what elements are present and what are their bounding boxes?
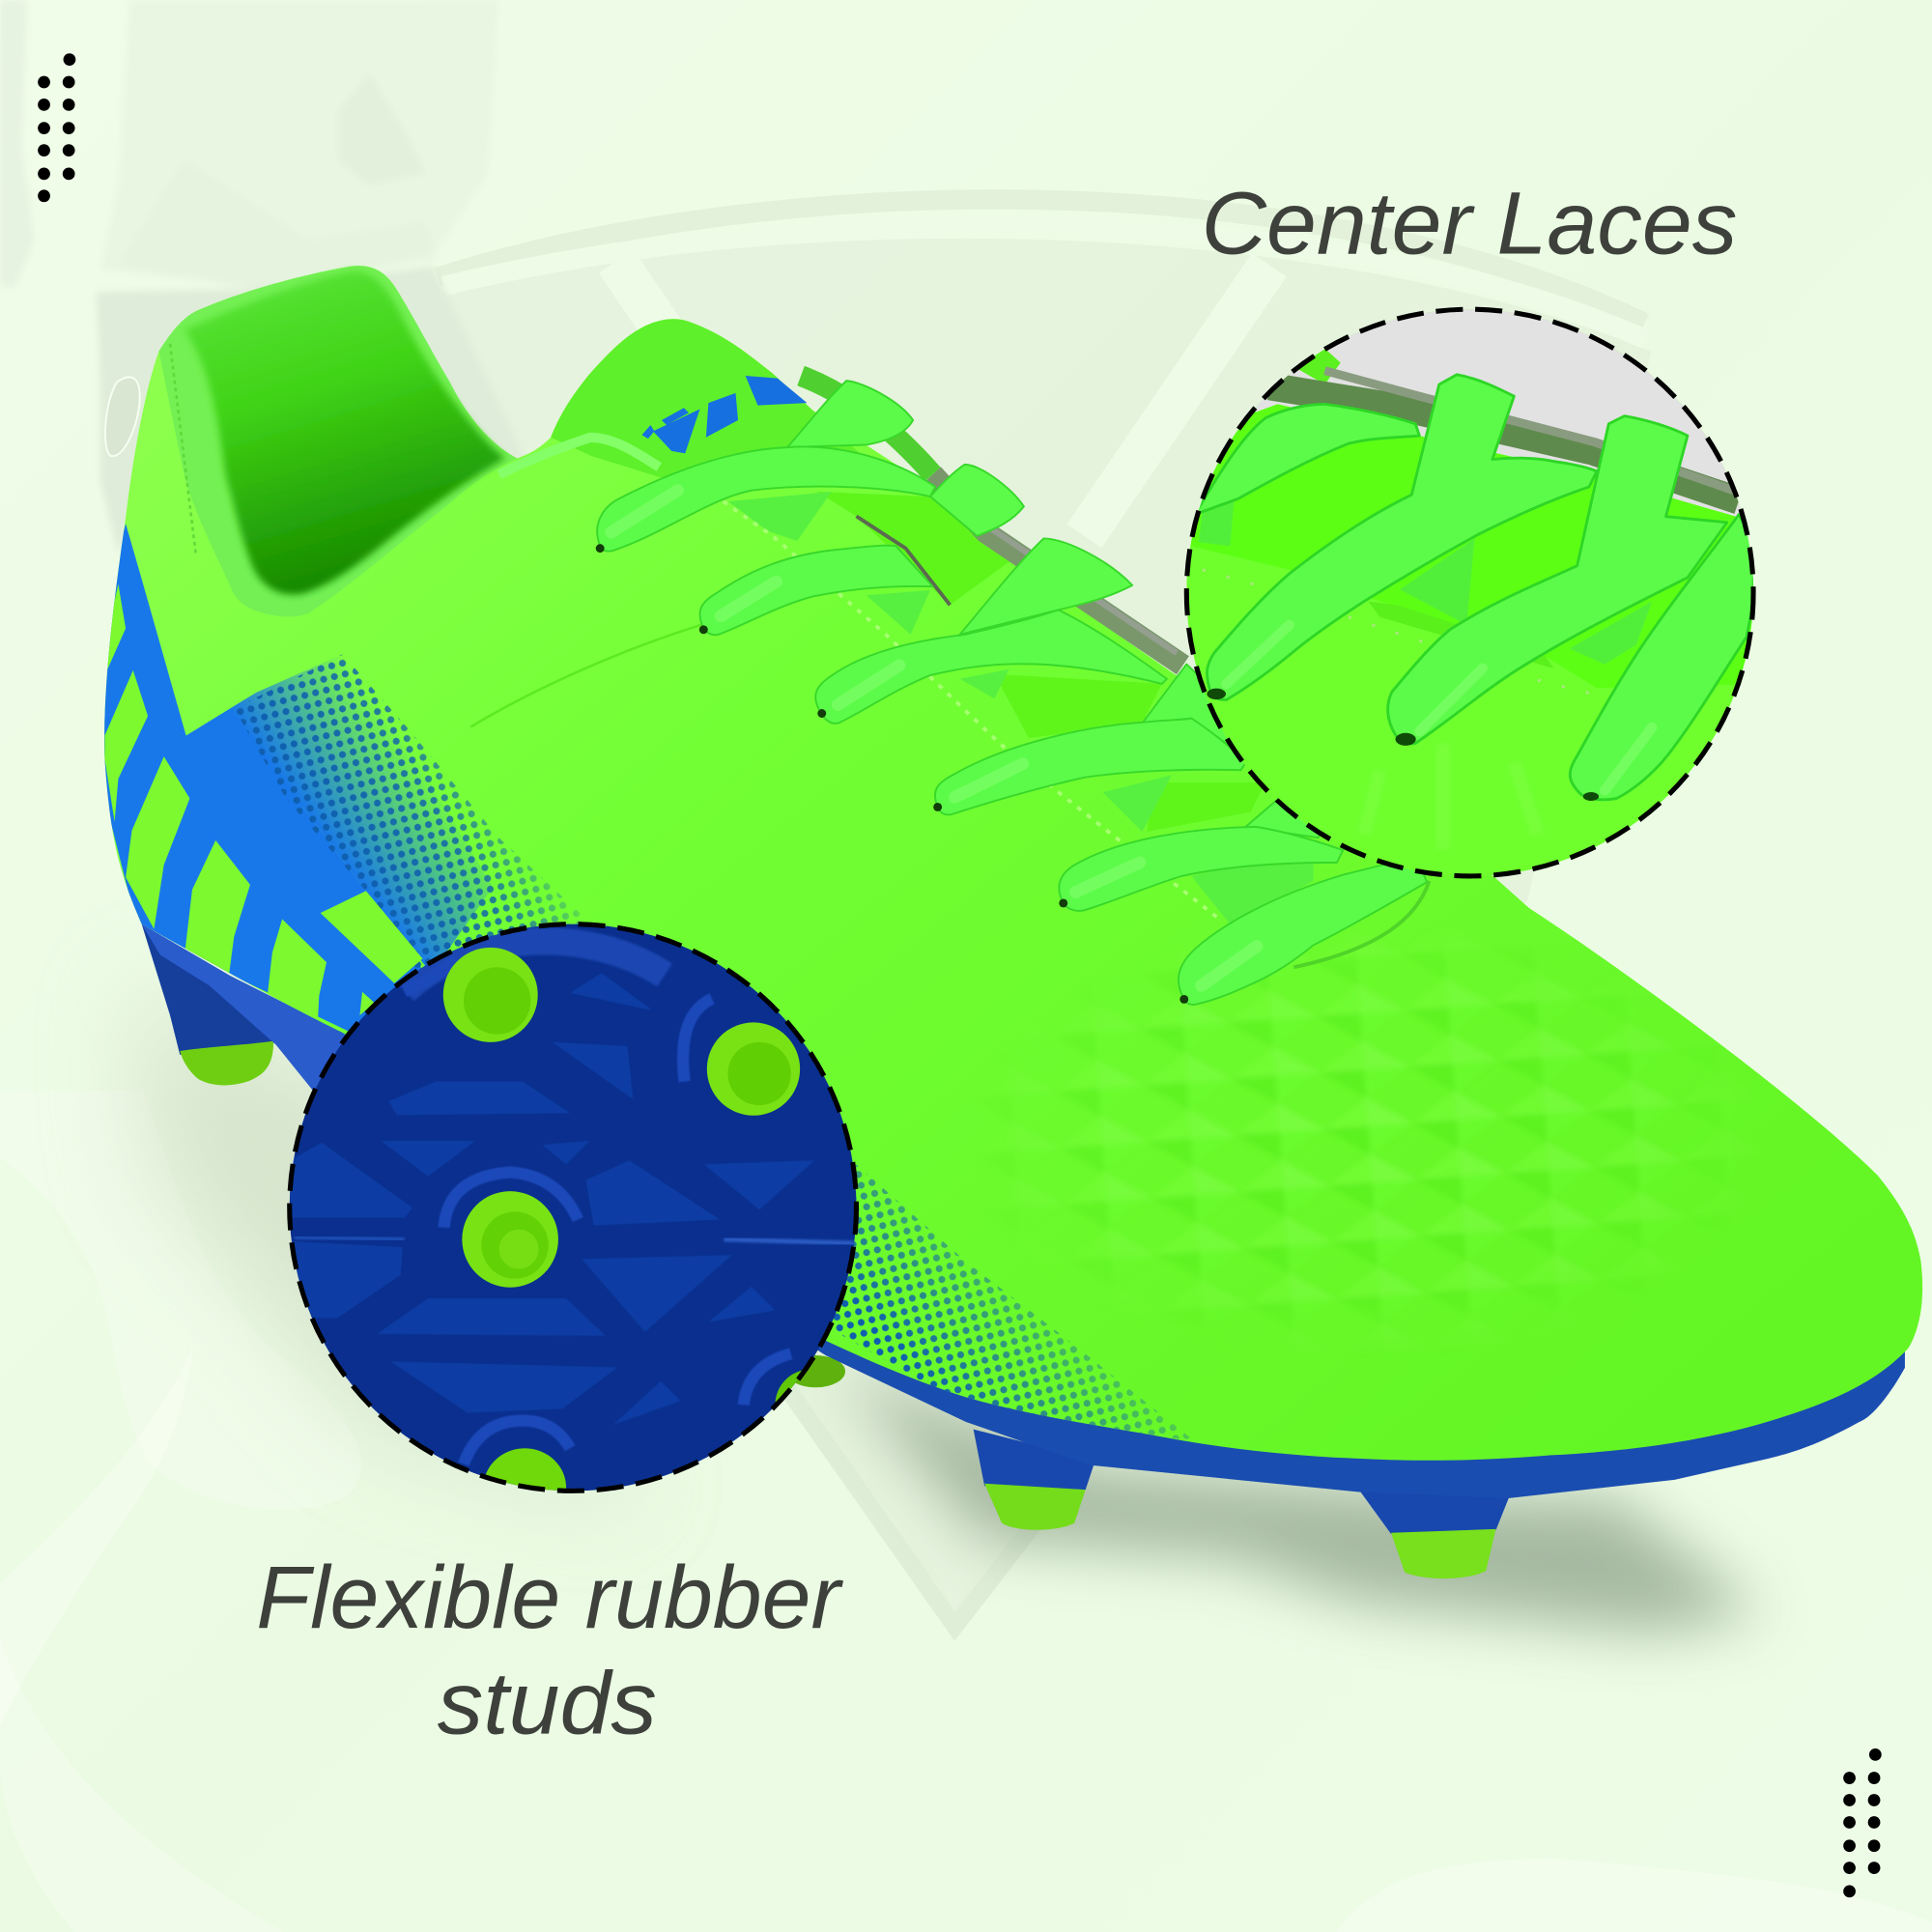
top glow — [405, 941, 665, 991]
lace tip highlights — [1226, 625, 1652, 790]
stud: bottom — [483, 1448, 566, 1527]
lace 1 — [597, 446, 935, 552]
stud: centre — [462, 1191, 558, 1288]
dashed ring — [1186, 309, 1753, 876]
midfoot stud — [974, 1430, 1095, 1490]
arm — [0, 0, 35, 288]
stud: top — [443, 948, 538, 1042]
lace 2 — [700, 546, 933, 635]
hand — [339, 74, 425, 185]
lace 5 — [1059, 827, 1343, 911]
toe streaks — [1364, 743, 1538, 850]
small stud — [786, 1355, 845, 1387]
dark slit — [856, 516, 950, 605]
bright tongue patches — [817, 492, 1265, 832]
lace 4 — [935, 719, 1246, 814]
halftone near forefoot — [813, 1164, 1195, 1441]
lace highlights — [611, 491, 1257, 985]
tongue tube and grey cord — [801, 376, 933, 474]
dashed ring — [290, 924, 856, 1491]
shorts and thigh — [96, 267, 529, 591]
football boot — [96, 266, 1922, 1578]
callout circle: studs detail — [290, 924, 856, 1527]
ground shadow: heel — [135, 985, 640, 1503]
heel collar opening — [185, 271, 505, 594]
sole — [142, 924, 1905, 1498]
mesh patches — [728, 492, 1314, 925]
callout circle: center laces detail — [1184, 307, 1756, 879]
wave ribbons — [0, 1091, 1932, 1932]
halftone dots — [234, 654, 585, 974]
straps — [787, 381, 913, 447]
jersey — [99, 0, 499, 288]
dots top-left — [38, 53, 75, 202]
panel crease — [470, 613, 739, 727]
jersey folds — [118, 160, 438, 288]
upper — [104, 266, 1922, 1461]
throat — [724, 376, 1430, 967]
lace 6 — [1179, 856, 1427, 1005]
green heel stripes — [104, 584, 423, 1019]
grey cord — [1269, 386, 1739, 500]
eyestay stitching — [724, 501, 1221, 921]
lace eyelets — [596, 544, 1188, 1004]
heading: flexible rubber studs — [256, 1548, 843, 1753]
lace hole shadows — [1207, 689, 1599, 801]
halftone blue wash — [186, 654, 493, 974]
ground shadow: forefoot — [838, 1368, 1762, 1633]
ghost player photo — [0, 0, 529, 591]
top lime sliver — [1298, 350, 1341, 383]
emblem shield and V — [434, 199, 1651, 1627]
stitching — [1203, 570, 1593, 694]
stud bases — [405, 959, 791, 1464]
shorts number — [105, 377, 140, 456]
lace 3 — [815, 610, 1167, 724]
heading: flexible rubber studs: studs — [438, 1655, 657, 1753]
stitch band — [1368, 601, 1553, 668]
inner bright tongue — [1159, 404, 1758, 688]
mesh — [1199, 498, 1652, 665]
collar rim — [159, 266, 518, 616]
blue heel panel — [96, 524, 585, 1047]
studs — [142, 924, 1511, 1578]
heel sole highlight — [142, 924, 382, 1103]
quilted toe texture — [1034, 972, 1674, 1304]
heading: center laces: Center Laces — [1202, 175, 1737, 273]
rim running onto tongue — [499, 438, 659, 474]
stud: clipped right — [775, 1370, 846, 1440]
grey backdrop — [1254, 309, 1741, 517]
toe stitching — [1293, 881, 1430, 967]
laces — [597, 381, 1427, 1005]
sole tread patches — [290, 973, 814, 1425]
front stud — [1355, 1485, 1511, 1534]
centre rib highlight — [724, 1239, 854, 1243]
laces — [1195, 375, 1754, 800]
collar top stitching — [170, 344, 196, 554]
logo on tongue — [642, 376, 807, 453]
heel stud — [142, 924, 281, 1055]
dots bottom-right — [1843, 1748, 1882, 1897]
tongue — [551, 319, 863, 487]
heading: flexible rubber studs: Flexible rubber — [256, 1548, 843, 1647]
stud: right — [707, 1022, 800, 1116]
lower panel — [1186, 546, 1734, 875]
